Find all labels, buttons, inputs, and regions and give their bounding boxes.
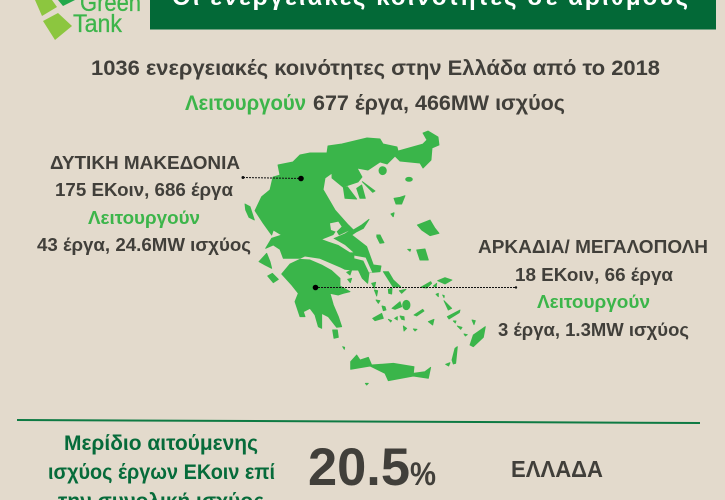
- section divider: [17, 420, 700, 423]
- callout: Arcadia / Megalopoli: Λειτουργούν: [537, 292, 650, 312]
- heading: operating projects: [185, 92, 565, 115]
- callout: Western Macedonia: 175 ΕΚοιν, 686 έργα: [55, 180, 233, 200]
- share description: [48, 432, 275, 500]
- region label: ΕΛΛΑΔΑ: [511, 456, 603, 482]
- callout marker: Western Macedonia: [242, 176, 304, 181]
- northern Aegean islands and Chalkidiki: [343, 167, 412, 204]
- callout: Western Macedonia: Λειτουργούν: [88, 208, 200, 228]
- callout: Western Macedonia: ΔΥΤΙΚΗ ΜΑΚΕΔΟΝΙΑ: [50, 153, 240, 173]
- callout: Western Macedonia: 43 έργα, 24.6MW ισχύος: [37, 235, 251, 255]
- Peloponnese, Crete and southern islands: [282, 259, 485, 385]
- callout: Arcadia / Megalopoli: 18 ΕΚοιν, 66 έργα: [515, 265, 673, 285]
- share description: Μερίδιο αιτούμενης: [64, 432, 258, 455]
- heading: operating projects: 677 έργα, 466MW ισχύος: [313, 92, 565, 115]
- callout: Arcadia / Megalopoli: [478, 237, 708, 340]
- share value: %: [410, 456, 436, 492]
- central mainland, Evia and western islands: [245, 190, 394, 283]
- callout: Western Macedonia: [37, 153, 251, 255]
- logo: Green Tank: Tank: [73, 10, 122, 38]
- share value: 20.5: [308, 438, 410, 497]
- callout marker: Arcadia / Megalopoli: [313, 285, 517, 290]
- northern mainland: [262, 131, 439, 215]
- logo: Green Tank: [35, 0, 141, 40]
- callout: Arcadia / Megalopoli: ΑΡΚΑΔΙΑ/ ΜΕΓΑΛΟΠΟΛΗ: [478, 237, 708, 257]
- heading: national total: 1036 ενεργειακές κοινότητες στην Ελλάδα από το 2018: [91, 57, 660, 80]
- callout: Arcadia / Megalopoli: 3 έργα, 1.3MW ισχύος: [498, 320, 689, 340]
- heading: operating projects: Λειτουργούν: [185, 92, 306, 115]
- title banner: [150, 0, 716, 30]
- share description: ισχύος έργων ΕΚοιν επί: [48, 461, 275, 484]
- map of Greece: [245, 131, 485, 385]
